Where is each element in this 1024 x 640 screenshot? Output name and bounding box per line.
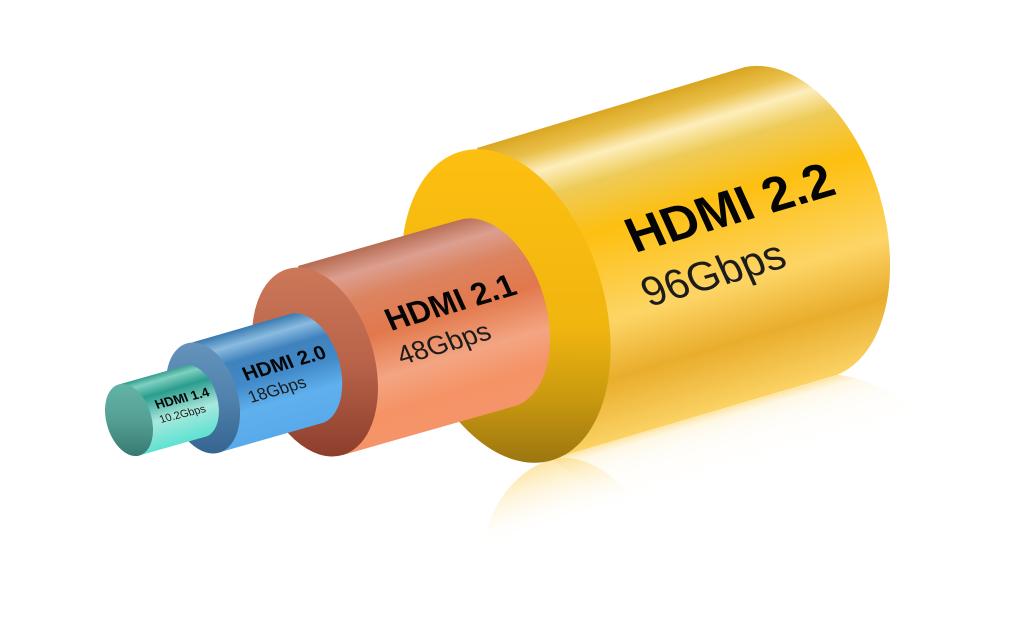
front face: HDMI 2.2 (366, 124, 646, 488)
cylinder: HDMI 2.2 (366, 66, 890, 488)
front face: HDMI 2.1 (231, 252, 399, 472)
speed: 10.2Gbps: 10.2Gbps (158, 403, 208, 426)
label: HDMI 2.0: HDMI 2.0 (239, 342, 330, 386)
front face: HDMI 2.0 (153, 333, 253, 463)
cylinder body: HDMI 2.1 (298, 218, 550, 455)
floor reflection (484, 375, 925, 552)
label: HDMI 2.2: HDMI 2.2 (616, 152, 843, 263)
front face: HDMI 1.4 (97, 378, 161, 462)
cylinder body: HDMI 1.4 (118, 365, 219, 455)
label: HDMI 2.1: HDMI 2.1 (379, 267, 522, 337)
label: HDMI 1.4: HDMI 1.4 (152, 384, 212, 412)
cylinder body: HDMI 2.2 (477, 66, 890, 459)
speed: 18Gbps: 18Gbps (245, 373, 309, 407)
cylinder: HDMI 2.1 (231, 218, 550, 472)
cylinder body: HDMI 2.0 (192, 313, 342, 452)
cylinder: HDMI 1.4 (97, 365, 219, 462)
cylinder: HDMI 2.0 (153, 313, 342, 463)
speed: 48Gbps: 48Gbps (392, 315, 496, 370)
speed: 96Gbps: 96Gbps (633, 231, 793, 315)
